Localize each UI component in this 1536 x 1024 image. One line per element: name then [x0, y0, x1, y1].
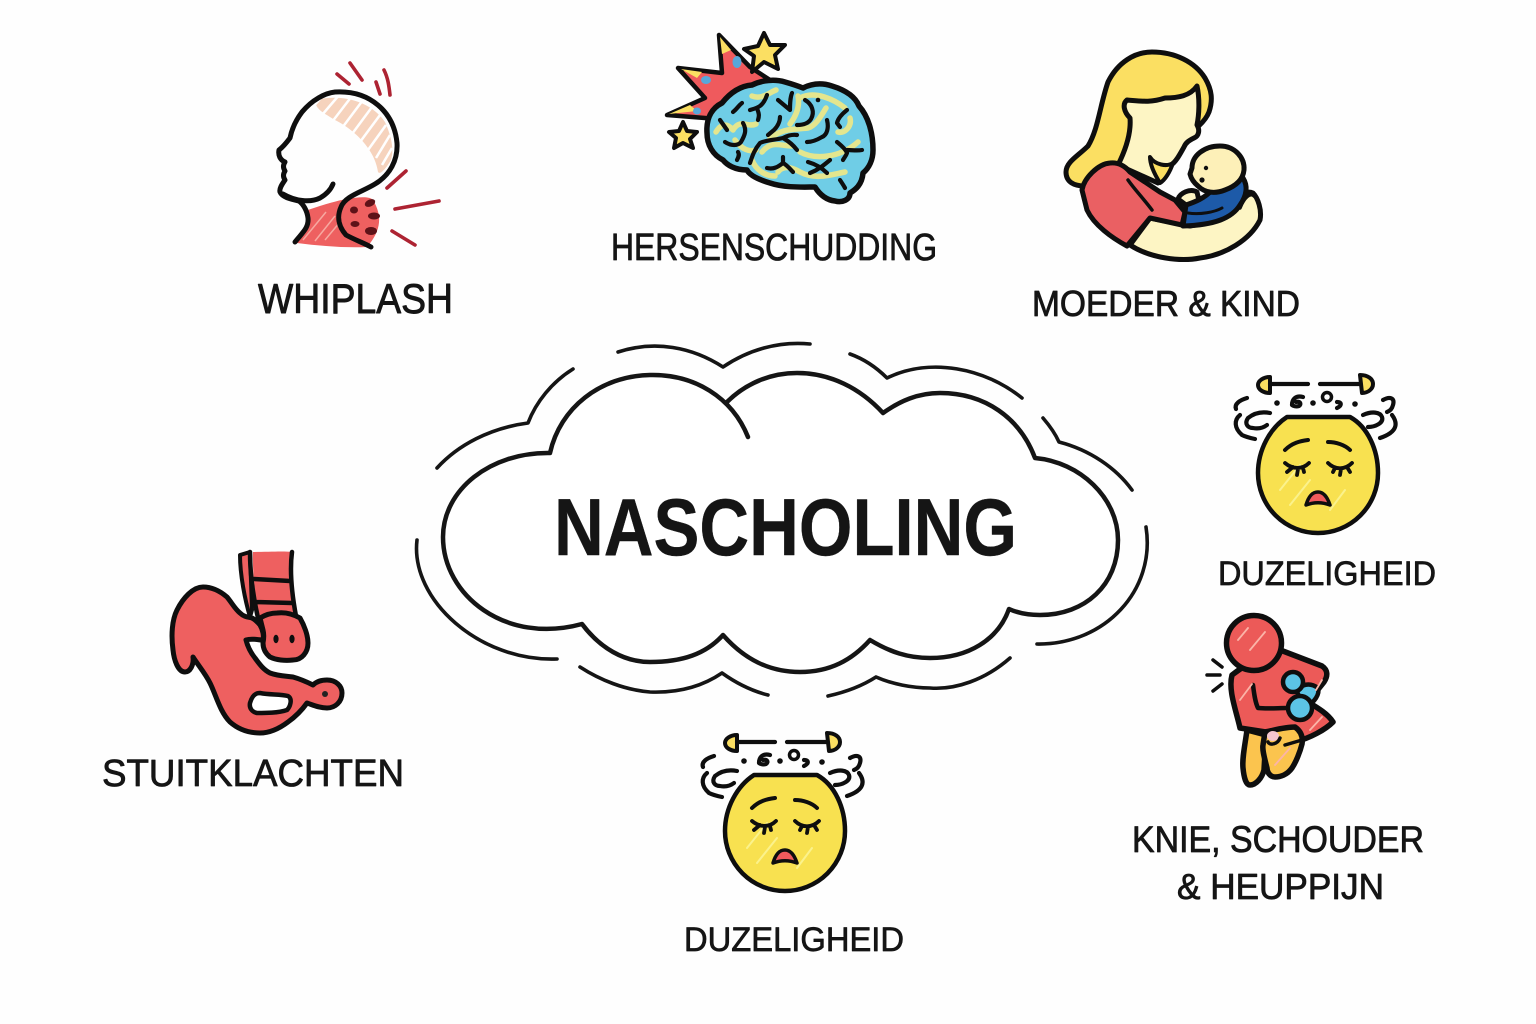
title: NASCHOLING — [554, 483, 1017, 573]
label: duizeligheid right: DUZELIGHEID — [1218, 555, 1436, 593]
label: knie schouder heuppijn — [1132, 819, 1424, 907]
icon: dizzy face bottom — [703, 733, 863, 891]
icon: mother and child — [1066, 52, 1261, 259]
central cloud — [417, 343, 1147, 696]
label: knie schouder heuppijn: & HEUPPIJN — [1177, 866, 1384, 907]
label: moeder en kind: MOEDER & KIND — [1032, 283, 1300, 324]
label: hersenschudding: HERSENSCHUDDING — [611, 227, 937, 269]
icon: tailbone — [172, 552, 342, 733]
label: duizeligheid bottom: DUZELIGHEID — [684, 921, 904, 959]
icon: knee, shoulder and hip pain — [1207, 616, 1333, 785]
label: stuitklachten: STUITKLACHTEN — [102, 753, 404, 795]
label: knie schouder heuppijn: KNIE, SCHOUDER — [1132, 819, 1424, 860]
icon: whiplash — [279, 63, 439, 247]
icon: concussion brain — [667, 33, 873, 202]
icon: dizzy face right — [1236, 375, 1396, 533]
label: whiplash: WHIPLASH — [258, 275, 453, 322]
